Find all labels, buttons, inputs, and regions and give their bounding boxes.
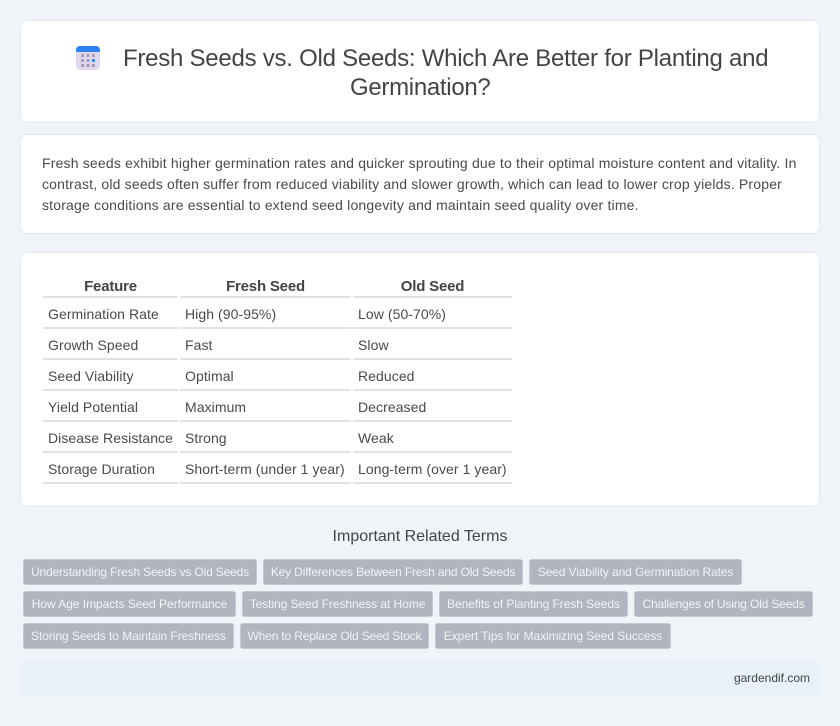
- tag: Storing Seeds to Maintain Freshness: [31, 629, 226, 643]
- tag: [23, 591, 236, 617]
- row: seed viability: Seed Viability: [48, 368, 134, 384]
- footer source: gardendif.com: [734, 671, 810, 685]
- heading: related terms: Important Related Terms: [333, 528, 507, 545]
- table header: Feature: [84, 278, 137, 295]
- footer bar: [20, 662, 820, 696]
- related term tags: [23, 559, 813, 649]
- table header: [84, 278, 464, 295]
- row: germination rate: Germination Rate: [48, 306, 159, 322]
- tag: Seed Viability and Germination Rates: [538, 565, 733, 579]
- panel: summary text: [20, 134, 820, 234]
- tag: Key Differences Between Fresh and Old Seeds: [271, 565, 515, 579]
- row: yield potential: [48, 399, 426, 415]
- tag: Challenges of Using Old Seeds: [642, 597, 805, 611]
- row: seed viability: Reduced: [358, 368, 415, 384]
- row: yield potential: Decreased: [358, 399, 426, 415]
- row: storage duration: Long-term (over 1 year): [358, 461, 507, 477]
- tag: [240, 623, 429, 649]
- panel: header: [20, 20, 820, 123]
- title: Fresh Seeds vs. Old Seeds: Which Are Better for Planting and: [123, 45, 768, 72]
- row: disease resistance: [48, 430, 394, 446]
- row: yield potential: Yield Potential: [48, 399, 138, 415]
- table header: Fresh Seed: [226, 278, 305, 295]
- title: [123, 45, 768, 101]
- tag: [435, 623, 671, 649]
- tag: Testing Seed Freshness at Home: [250, 597, 425, 611]
- comparison table: [43, 278, 512, 484]
- tag: [242, 591, 433, 617]
- tag: [529, 559, 742, 585]
- icon: calendar: [76, 46, 100, 70]
- row: growth speed: [48, 337, 389, 353]
- title: Germination?: [350, 74, 490, 101]
- tag: [23, 623, 234, 649]
- summary paragraph: Fresh seeds exhibit higher germination rates and quicker sprouting due to their optimal moisture content and vitality. In contrast, old seeds often suffer from reduced viability and slower growth, which can lead to lower crop yields. Proper storage conditions are essential to extend seed longevity and maintain seed quality over time.: [42, 155, 797, 213]
- tag: When to Replace Old Seed Stock: [248, 629, 421, 643]
- row: seed viability: [48, 368, 415, 384]
- row: seed viability: Optimal: [185, 368, 234, 384]
- row: disease resistance: Weak: [358, 430, 394, 446]
- tag: [23, 559, 257, 585]
- tag: [439, 591, 628, 617]
- row: yield potential: Maximum: [185, 399, 246, 415]
- row: storage duration: [48, 461, 507, 477]
- tag: How Age Impacts Seed Performance: [32, 597, 227, 611]
- row: storage duration: Short-term (under 1 year): [185, 461, 345, 477]
- row: growth speed: Slow: [358, 337, 389, 353]
- tag: Expert Tips for Maximizing Seed Success: [444, 629, 662, 643]
- row: growth speed: Growth Speed: [48, 337, 138, 353]
- tag: [263, 559, 523, 585]
- row: germination rate: High (90-95%): [185, 306, 276, 322]
- tag: [634, 591, 813, 617]
- row: storage duration: Storage Duration: [48, 461, 155, 477]
- row: germination rate: [48, 306, 446, 322]
- tag: Understanding Fresh Seeds vs Old Seeds: [31, 565, 249, 579]
- panel: comparison table: [20, 252, 820, 507]
- row: disease resistance: Strong: [185, 430, 227, 446]
- tag: Benefits of Planting Fresh Seeds: [447, 597, 620, 611]
- row: germination rate: Low (50-70%): [358, 306, 446, 322]
- row: disease resistance: Disease Resistance: [48, 430, 173, 446]
- table header: Old Seed: [401, 278, 464, 295]
- row: growth speed: Fast: [185, 337, 213, 353]
